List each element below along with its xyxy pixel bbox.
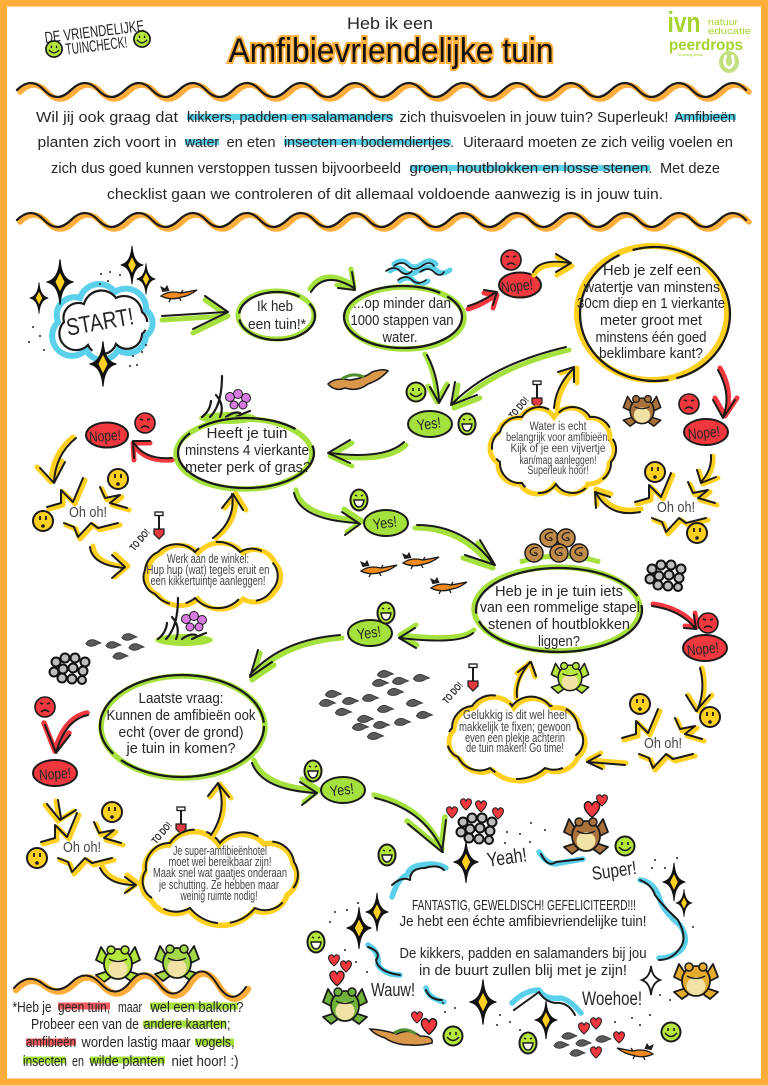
intro paragraph with highlights: Amfibieën <box>674 109 736 126</box>
cloud: water is echt belangrijk: belangrijk voor amfibieën. <box>506 432 610 444</box>
node: ik heb een tuin: Ik heb <box>257 298 293 315</box>
icon: laughing face 3 <box>378 602 394 624</box>
node: watertje question: meter groot met <box>600 312 703 329</box>
cloud: super-amfibieënhotel: moet wel bereikbaar zijn! <box>168 855 272 869</box>
arrow: stappen yes <box>425 354 449 403</box>
node: watertje question: 30cm diep en 1 vierkante <box>577 295 725 312</box>
to do shovel: water cloud: TO DO! <box>507 395 532 421</box>
cloud: werk aan de winkel <box>143 542 281 609</box>
icon: laughing face 4 <box>304 760 322 782</box>
decorative wave top <box>17 83 749 99</box>
arrow: red to nope left <box>133 441 172 460</box>
arrow: nope to oh oh middle <box>686 668 712 711</box>
arrow: watertje yes <box>451 347 569 408</box>
arrow: tuin to stappen <box>310 269 355 292</box>
icon: scribble cloud left <box>50 654 90 684</box>
node: perk of gras question: meter perk of gras? <box>185 459 311 476</box>
arrow: nope to oh oh right <box>697 455 718 484</box>
node: minder dan 1000 stappen: water. <box>382 329 418 346</box>
arrow: yes to final <box>374 795 446 852</box>
cloud: water is echt belangrijk: Superleuk hoor! <box>528 465 588 477</box>
sparkles and dots around start <box>28 246 155 386</box>
node: watertje question <box>577 246 730 381</box>
footnote text with highlights: amfibieën <box>26 1034 76 1051</box>
node: rommelige stapel question: van een rommelige stapel <box>480 599 640 616</box>
icon: laughing face 2 <box>350 490 368 510</box>
final panel: exclamations: Super! <box>590 858 638 885</box>
footnote text with highlights: andere kaarten; <box>144 1016 230 1033</box>
icon: smiley <box>406 382 426 402</box>
cloud: gelukkig fixen: even een plekje achterin <box>465 731 565 745</box>
footnote text with highlights: Probeer een van de <box>31 1016 139 1033</box>
node: minder dan 1000 stappen <box>344 286 464 349</box>
tagline: de vriendelijke tuincheck: DE VRIENDELIJKE <box>44 18 145 47</box>
arrow: oh oh to werk cloud <box>90 546 128 578</box>
logos: ivn natuur educatie and peerdrops: peerdrops <box>669 37 743 54</box>
node: laatste vraag question: je tuin in komen? <box>126 740 236 757</box>
node: minder dan 1000 stappen: 1000 stappen van <box>350 312 454 329</box>
node: watertje question: watertje van minstens <box>583 279 720 296</box>
oh oh burst bottom: Oh oh! <box>63 839 101 856</box>
arrow: start to tuin <box>162 296 228 333</box>
badge: yes 3 <box>348 620 392 646</box>
arrow: red to nope right middle <box>652 604 697 629</box>
footnote text with highlights: insecten <box>23 1053 67 1070</box>
arrow: gelukkig up to stapel <box>516 662 536 698</box>
final panel: message text: Je hebt een échte amfibievriendelijke tuin! <box>400 913 646 930</box>
tagline: de vriendelijke tuincheck <box>44 18 150 59</box>
logos: ivn natuur educatie and peerdrops: ivn <box>668 7 700 39</box>
to do shovel: gelukkig cloud <box>441 664 478 706</box>
arrow: hotel cloud up to laatste vraag <box>208 783 231 836</box>
footnote text with highlights: vogels, <box>196 1034 234 1051</box>
final panel: exclamations: Woehoe! <box>582 989 642 1010</box>
badge: nope left: Nope! <box>88 427 122 446</box>
badge: nope: Nope! <box>500 276 534 297</box>
final panel: message text <box>400 897 646 979</box>
footnote text with highlights: wilde planten <box>89 1053 164 1070</box>
intro paragraph with highlights: kikkers, padden en salamanders <box>187 109 393 126</box>
arrow: laatste vraag to yes <box>252 760 319 805</box>
oh oh burst left <box>33 469 129 539</box>
title <box>228 14 554 70</box>
footnote text with highlights: geen tuin, <box>58 999 110 1016</box>
final panel: exclamations <box>371 844 642 1010</box>
intro paragraph with highlights: Met deze <box>660 160 720 177</box>
oh oh burst bottom <box>27 802 123 874</box>
intro paragraph with highlights: en eten <box>226 134 276 151</box>
badge: yes 3: Yes! <box>356 623 382 644</box>
arrow: yellow to big question <box>533 254 572 275</box>
cloud: werk aan de winkel: Werk aan de winkel: <box>167 552 249 566</box>
node: rommelige stapel question: Heb je in je tuin iets <box>495 583 623 600</box>
logos: ivn natuur educatie and peerdrops: Growing ideas <box>677 52 703 57</box>
icons: three orange salamanders <box>361 553 467 594</box>
icon: laughing face <box>458 414 476 434</box>
badge: nope bottom left: Nope! <box>38 765 72 784</box>
cloud: super-amfibieënhotel: weinig ruimte nodig! <box>180 889 258 903</box>
icon: tadpoles left <box>86 634 144 659</box>
badge: yes 2 <box>364 510 408 536</box>
icon: grass with flowers <box>199 376 257 424</box>
final panel: confetti dots <box>329 822 694 1031</box>
node: laatste vraag question: Laatste vraag: <box>138 690 224 707</box>
icon: sad face left <box>135 413 155 433</box>
arrow: oh oh to hotel cloud <box>100 866 138 893</box>
intro paragraph with highlights: water <box>184 134 219 151</box>
node: perk of gras question <box>176 418 314 489</box>
arrow: oh oh to gelukkig cloud <box>587 753 626 769</box>
final panel: tadpoles <box>554 1033 611 1056</box>
icon: wood log pile <box>520 529 600 562</box>
to do shovel: gelukkig cloud: TO DO! <box>441 680 466 706</box>
footnote wave <box>14 971 248 999</box>
final panel: blue cloud outline <box>368 852 685 1015</box>
cloud: water is echt belangrijk <box>490 407 616 494</box>
node: rommelige stapel question <box>474 567 642 652</box>
node: minder dan 1000 stappen: ...op minder dan <box>353 295 451 312</box>
badge: yes 2: Yes! <box>372 513 398 534</box>
intro paragraph with highlights: checklist gaan we controleren of dit allemaal voldoende aanwezig is in jouw tuin. <box>107 186 663 203</box>
footnote text with highlights: wel een balkon? <box>150 999 244 1016</box>
node: laatste vraag question: Kunnen de amfibieën ook <box>106 707 256 724</box>
footnote text with highlights: maar <box>118 999 142 1016</box>
cloud: gelukkig fixen <box>447 695 585 781</box>
cloud: werk aan de winkel: een kikkertuintje aanleggen! <box>150 574 266 588</box>
title: Amfibievriendelijke tuin <box>228 32 554 70</box>
node: laatste vraag question: echt (over de grond) <box>118 724 244 741</box>
final panel: message text: FANTASTIG, GEWELDISCH! GEFELICITEERD!!! <box>412 897 636 914</box>
icon: scribble cloud right <box>646 560 686 591</box>
icon: sad face middle <box>698 613 718 633</box>
badge: yes 1 <box>408 411 452 437</box>
start cloud <box>52 284 153 360</box>
final panel: smileys <box>308 836 680 1054</box>
arrow: red to nope bottom left <box>44 713 88 753</box>
icon: water waves <box>386 261 450 284</box>
icon: brown toad <box>623 396 661 426</box>
footnote text with highlights: worden lastig maar <box>81 1034 190 1051</box>
cloud: gelukkig fixen: Gelukkig is dit wel heel <box>463 708 567 722</box>
oh oh burst right <box>635 462 717 543</box>
footnote text with highlights: niet hoor! :) <box>172 1053 239 1070</box>
badge: yes 4: Yes! <box>329 780 355 801</box>
arrow: yes to laatste vraag <box>250 635 342 680</box>
intro paragraph with highlights: groen, houtblokken en losse stenen. <box>410 160 652 177</box>
arrow: oh oh to water cloud <box>595 489 641 513</box>
cloud: super-amfibieënhotel: je schutting. Ze hebben maar <box>158 878 279 892</box>
logos: ivn natuur educatie and peerdrops: educatie <box>708 26 751 36</box>
badge: yes 1: Yes! <box>416 414 442 435</box>
badge: yes 4 <box>321 777 365 803</box>
node: ik heb een tuin <box>238 291 315 340</box>
final panel: exclamations: Yeah! <box>486 844 528 872</box>
final panel: message text: in de buurt zullen blij met je zijn! <box>419 962 627 979</box>
node: watertje question: minstens één goed <box>596 329 706 346</box>
icon: grass with flowers lower <box>155 598 213 646</box>
intro paragraph with highlights <box>36 109 736 203</box>
cloud: gelukkig fixen: makkelijk te fixen; gewoon <box>459 720 571 734</box>
oh oh burst left: Oh oh! <box>69 504 107 521</box>
icon: green frog <box>551 663 589 693</box>
node: watertje question: Heb je zelf een <box>603 262 701 279</box>
node: watertje question: beklimbare kant? <box>599 345 703 362</box>
water cloud arrow and red arrow (right side) <box>554 367 737 418</box>
arrow: nope to oh oh bottom <box>45 800 76 821</box>
badge: nope right: Nope! <box>687 423 721 444</box>
intro paragraph with highlights: Uiteraard moeten ze zich veilig voelen en <box>463 134 733 151</box>
footnote text with highlights: en <box>72 1053 84 1070</box>
arrow: nope to oh oh left <box>37 437 76 483</box>
icons: two frogs above footnote <box>96 945 199 982</box>
to do shovel: werk cloud <box>128 512 164 553</box>
arrow: perk to yes <box>294 490 362 535</box>
intro paragraph with highlights: planten zich voort in <box>38 134 176 151</box>
tagline: de vriendelijke tuincheck: TUINCHECK! <box>65 34 128 59</box>
cloud: water is echt belangrijk: kan/mag aanleggen! <box>520 455 596 467</box>
final panel: hearts <box>329 795 624 1058</box>
arrow: stapel to yes <box>399 625 474 648</box>
badge: nope bottom left <box>33 760 77 786</box>
node: ik heb een tuin: een tuin!* <box>248 316 306 333</box>
oh oh burst right: Oh oh! <box>657 499 695 516</box>
icon: salamander near start <box>161 286 197 302</box>
icon: sad face bottom left <box>35 697 55 717</box>
final panel: message text: De kikkers, padden en salamanders bij jou <box>400 945 646 962</box>
cloud: super-amfibieënhotel: Je super-amfibieënhotel <box>173 844 267 858</box>
title: Heb ik een <box>347 14 433 33</box>
oh oh burst middle <box>622 694 720 770</box>
footnote text with highlights <box>12 999 244 1070</box>
icon: tadpoles middle <box>319 670 432 740</box>
intro paragraph with highlights: zich dus goed kunnen verstoppen tussen bijvoorbeeld <box>51 160 401 177</box>
icon: large salamander <box>328 370 388 389</box>
intro paragraph with highlights: zich thuisvoelen in jouw tuin? Superleuk! <box>400 109 668 126</box>
decorative wave bottom of intro <box>17 213 749 229</box>
cloud: water is echt belangrijk: Kijk of je een vijvertje <box>510 443 606 455</box>
arrow: yes to rommelige stapel <box>415 525 495 568</box>
start cloud: START! <box>64 303 136 342</box>
arrow: werk cloud up to perk <box>213 494 246 538</box>
final panel: salamanders <box>370 1029 653 1060</box>
cloud: werk aan de winkel: Hup hup (wat) tegels eruit en <box>146 563 270 577</box>
logos: ivn natuur educatie and peerdrops: natuur <box>708 17 738 27</box>
node: rommelige stapel question: stenen of houtblokken <box>488 616 630 633</box>
to do shovel: hotel cloud: TO DO! <box>150 820 175 846</box>
node: perk of gras question: Heeft je tuin <box>206 425 288 442</box>
intro paragraph with highlights: insecten en bodemdiertjes. <box>284 134 454 151</box>
final panel: toads and frogs <box>323 818 718 1024</box>
oh oh burst middle: Oh oh! <box>644 735 682 752</box>
icon: sad face <box>501 250 521 270</box>
badge: nope middle: Nope! <box>686 639 720 660</box>
arrow: red to nope <box>468 290 497 309</box>
cloud: super-amfibieënhotel <box>142 830 298 925</box>
cloud: gelukkig fixen: de tuin maken! Go time! <box>466 741 564 755</box>
footnote text with highlights: *Heb je <box>12 999 52 1016</box>
cloud: water is echt belangrijk: Water is echt <box>530 421 587 433</box>
node: rommelige stapel question: liggen? <box>538 633 580 650</box>
intro paragraph with highlights: Wil jij ook graag dat <box>36 109 179 126</box>
cloud: super-amfibieënhotel: Maak snel wat gaatjes onderaan <box>153 866 287 880</box>
icon: sad face right <box>679 394 699 414</box>
arrow: yes to perk <box>328 440 406 466</box>
to do shovel: werk cloud: TO DO! <box>128 527 153 553</box>
final panel: sparkles <box>347 842 692 1039</box>
node: perk of gras question: minstens 4 vierkante <box>185 442 309 459</box>
node: laatste vraag question <box>100 675 265 778</box>
logos: ivn natuur educatie and peerdrops <box>668 7 751 73</box>
final panel: scribble cloud <box>456 814 496 844</box>
final panel: exclamations: Wauw! <box>371 980 415 1000</box>
